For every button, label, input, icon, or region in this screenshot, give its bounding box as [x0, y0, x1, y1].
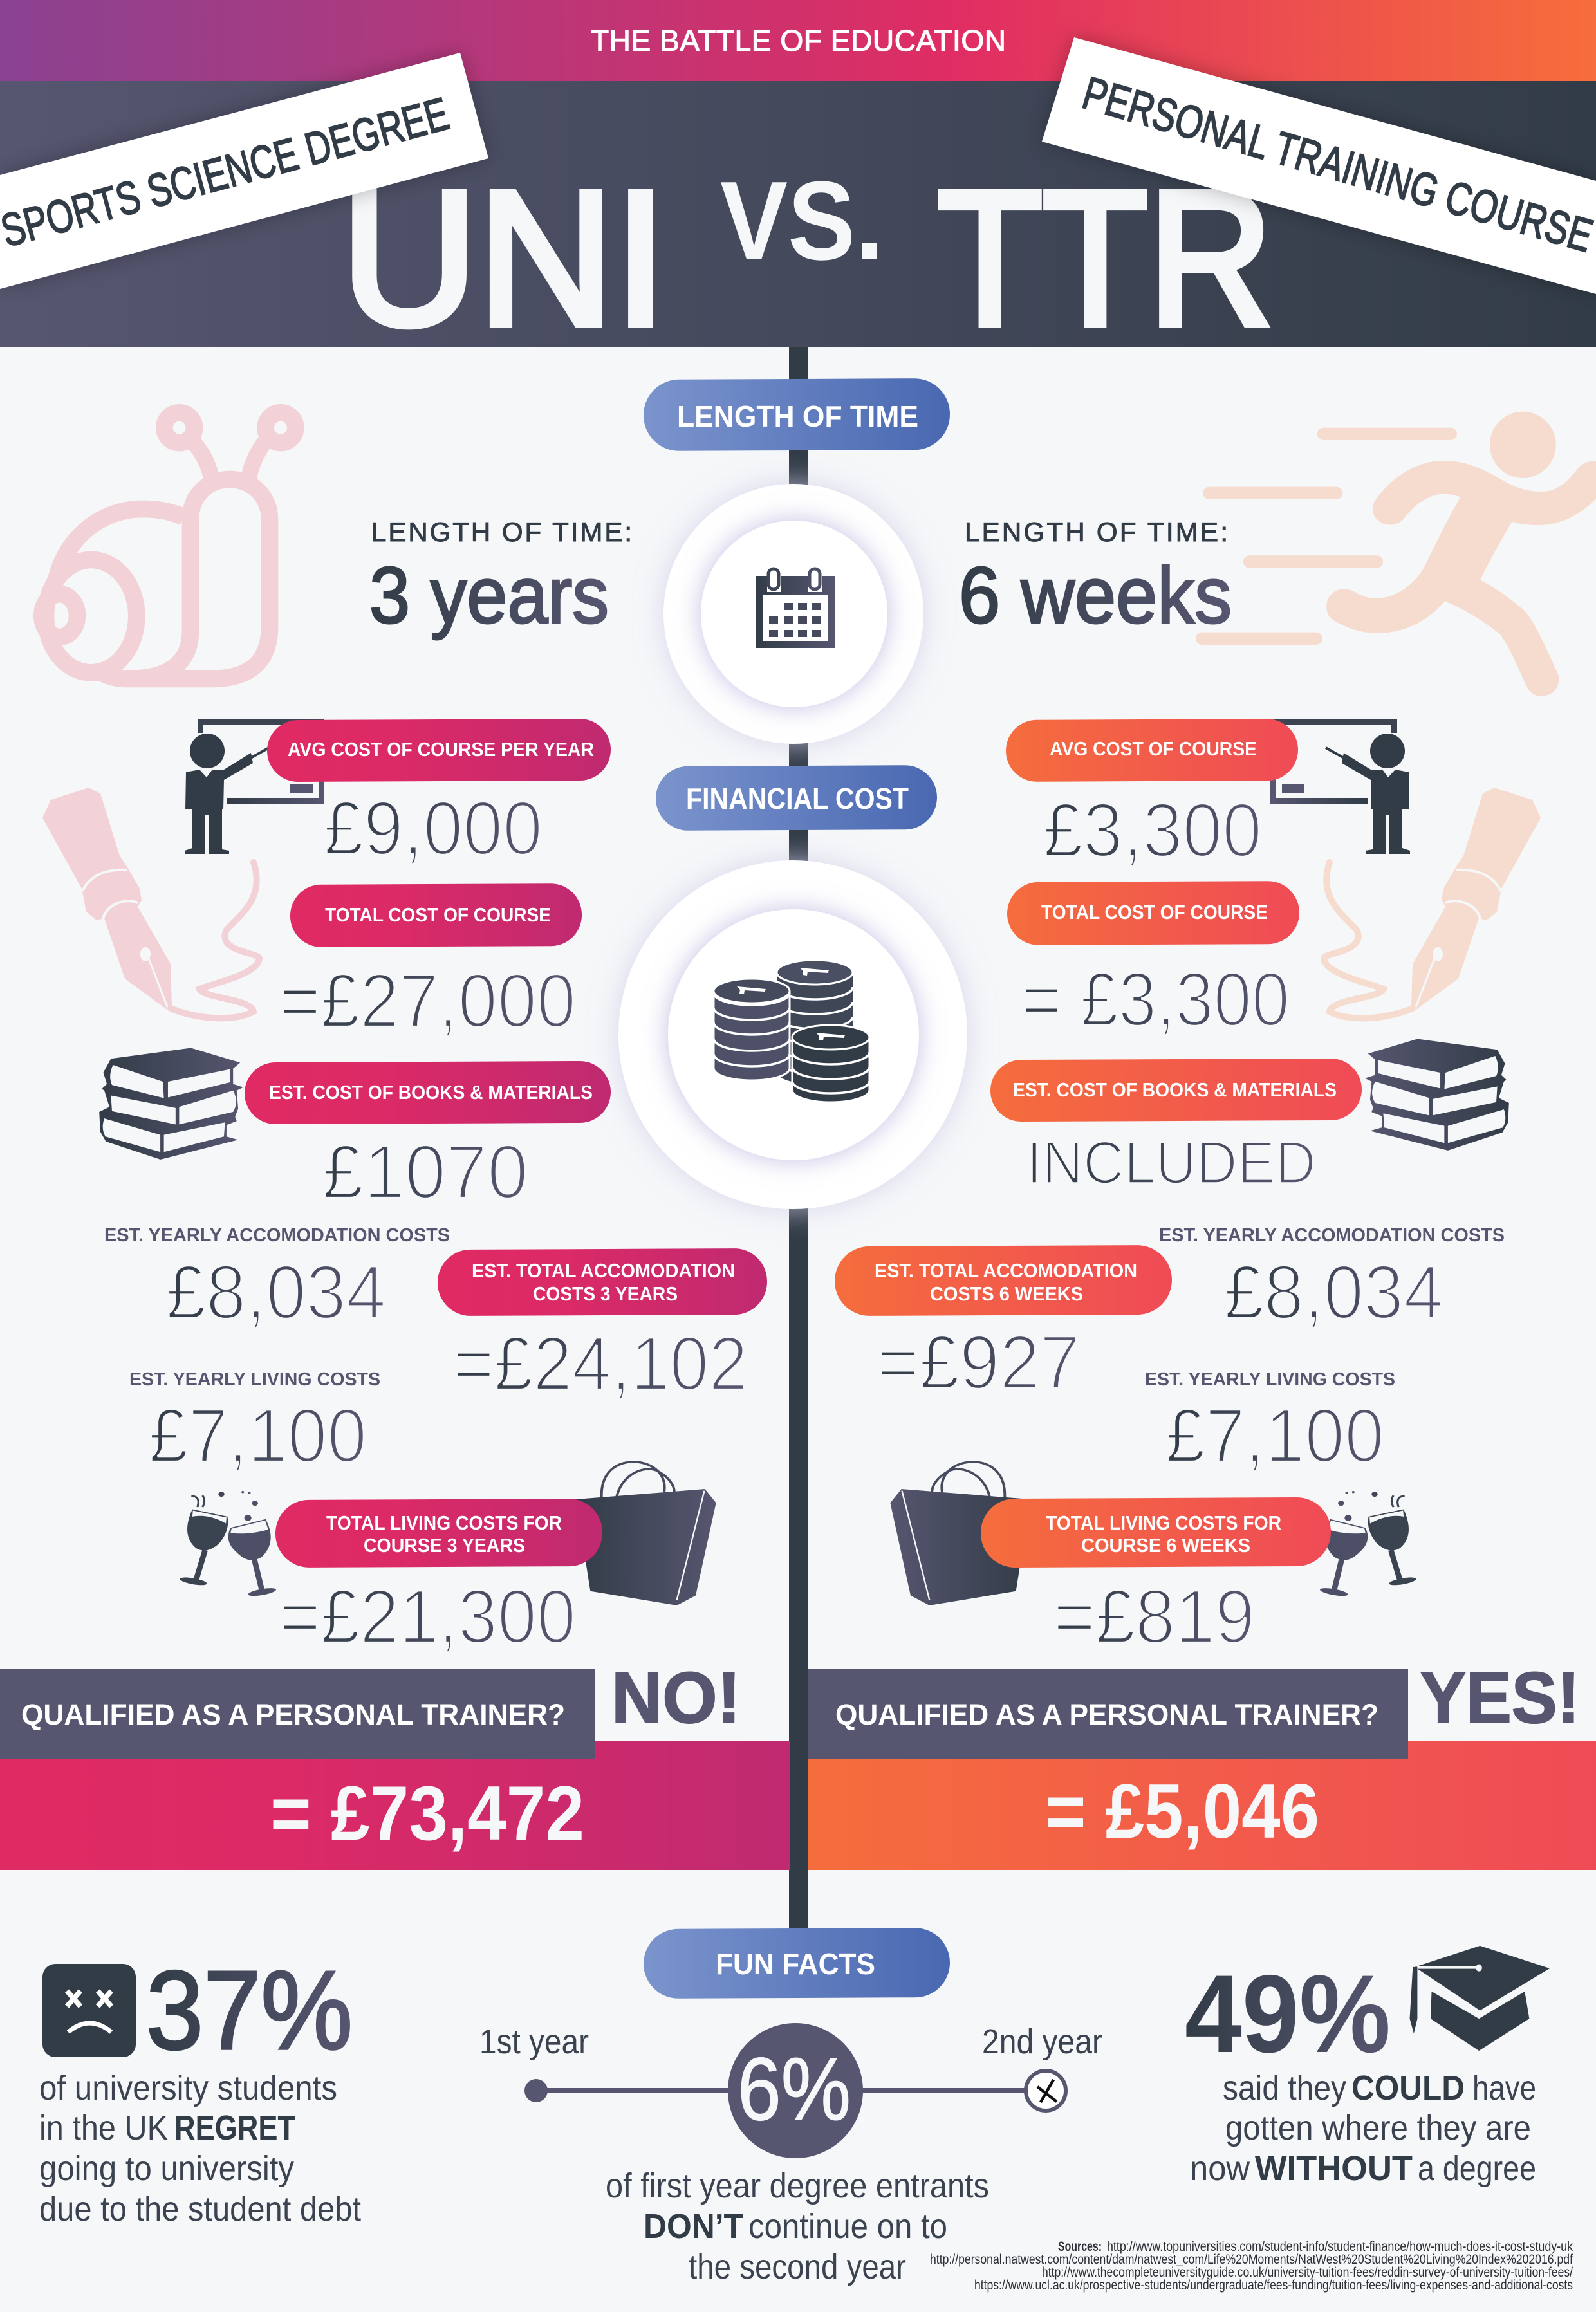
description: COULD: [1351, 2069, 1465, 2107]
top gradient band: [0, 0, 1596, 81]
icon: shopping bag: [575, 1462, 716, 1605]
title: VS.: VS.: [720, 158, 884, 283]
question bar: QUALIFIED AS A PERSONAL TRAINER?: [835, 1698, 1378, 1731]
pill: avg cost of course: [1006, 719, 1298, 782]
sources: Sources:: [1058, 2239, 1102, 2254]
description: due to the student debt: [39, 2190, 361, 2228]
pill: total cost of course: [290, 883, 582, 947]
pill: total accommodation: EST. TOTAL ACCOMODATION: [875, 1259, 1137, 1282]
badge: 6%: [728, 2023, 863, 2158]
figure: £27,000: =£27,000: [279, 958, 576, 1044]
label: yearly accommodation: EST. YEARLY ACCOMODATION COSTS: [1159, 1225, 1505, 1246]
figure: £1070: £1070: [322, 1129, 528, 1215]
icon: wine glasses: [1319, 1491, 1417, 1598]
answer: no: NO!: [611, 1658, 741, 1738]
pill: total living costs: TOTAL LIVING COSTS FOR: [326, 1512, 562, 1534]
pill: total accommodation: COSTS 6 WEEKS: [930, 1282, 1083, 1305]
total: £5,046: = £5,046: [1045, 1768, 1319, 1854]
description: in the UK: [39, 2109, 168, 2147]
pill: financial cost: [656, 765, 937, 831]
panel: 6 percent fact: [479, 2022, 1102, 2286]
pill: fun facts: FUN FACTS: [716, 1947, 875, 1981]
pill: total living costs: COURSE 6 WEEKS: [1081, 1534, 1250, 1557]
pill: total cost of course: TOTAL COST OF COURSE: [1041, 901, 1268, 923]
circle: coin medallion: [618, 860, 967, 1209]
figure: £927: =£927: [877, 1320, 1080, 1405]
icon: fountain pen: [42, 788, 259, 1018]
pill: total living costs: [275, 1499, 602, 1568]
description: [1190, 2069, 1536, 2188]
right: length of time: 6 weeks: [959, 551, 1232, 640]
icon: teacher at board: [185, 719, 324, 854]
icon: graduation cap: [1410, 1946, 1550, 2051]
description: said they: [1223, 2069, 1346, 2107]
panel: personal training costs: [835, 719, 1541, 1660]
panel: 37 percent fact: [39, 1947, 361, 2228]
title: UNI: UNI: [341, 151, 667, 365]
pill: financial cost: FINANCIAL COST: [686, 782, 909, 815]
label: yearly accommodation: EST. YEARLY ACCOMODATION COSTS: [104, 1225, 450, 1246]
pill: total living costs: COURSE 3 YEARS: [364, 1534, 525, 1557]
icon: calendar: [756, 569, 835, 648]
icon: shopping bag: [890, 1462, 1031, 1605]
description: of university students: [39, 2069, 337, 2107]
figure: £8,034: £8,034: [166, 1250, 386, 1335]
figure: £3,300 total: = £3,300: [1021, 957, 1290, 1042]
icon: snail: [42, 412, 295, 679]
icon: wine glasses: [179, 1491, 277, 1598]
description: [606, 2167, 989, 2286]
dark header band: [0, 81, 1596, 347]
pill: total accommodation: COSTS 3 YEARS: [533, 1282, 678, 1305]
icon: sad face: [42, 1964, 136, 2057]
description: continue on to: [748, 2207, 947, 2246]
label: yearly living: EST. YEARLY LIVING COSTS: [129, 1369, 380, 1390]
pill: total cost of course: [1007, 881, 1299, 945]
pill: total accommodation: [438, 1248, 767, 1316]
pill: length of time: LENGTH OF TIME: [677, 400, 918, 433]
panel: university total: [0, 1658, 790, 1870]
label: 2nd year: 2nd year: [982, 2022, 1102, 2061]
figure: £819: =£819: [1053, 1574, 1255, 1660]
total: £73,472: = £73,472: [270, 1770, 584, 1856]
description: REGRET: [174, 2109, 295, 2147]
description: have: [1472, 2069, 1536, 2107]
total band: [808, 1741, 1596, 1870]
panel: header: [0, 0, 1596, 365]
figure: 49%: 49%: [1185, 1952, 1391, 2076]
icon: books: [99, 1048, 243, 1160]
figure: £7,100: £7,100: [1165, 1393, 1384, 1479]
figure: £3,300: £3,300: [1043, 788, 1262, 873]
description: WITHOUT: [1255, 2149, 1413, 2188]
figure: £9,000: £9,000: [324, 786, 543, 871]
description: now: [1190, 2149, 1250, 2188]
description: the second year: [689, 2248, 906, 2286]
circle: calendar medallion: [663, 484, 923, 744]
answer: yes: YES!: [1420, 1658, 1580, 1738]
description: [39, 2069, 361, 2228]
subtitle: THE BATTLE OF EDUCATION: [591, 24, 1006, 57]
timeline: [524, 2079, 1032, 2102]
question bar: [808, 1669, 1408, 1759]
left: length of time: 3 years: [369, 551, 609, 640]
badge: 6%: 6%: [738, 2040, 851, 2139]
pill: avg cost per year: AVG COST OF COURSE PER YEAR: [288, 738, 594, 761]
pill: total cost of course: TOTAL COST OF COURSE: [325, 903, 551, 926]
question bar: QUALIFIED AS A PERSONAL TRAINER?: [21, 1698, 565, 1731]
icon: running man: [1196, 412, 1596, 696]
pill: books and materials: EST. COST OF BOOKS & MATERIALS: [269, 1081, 593, 1104]
description: DON’T: [644, 2207, 743, 2246]
question bar: [0, 1669, 595, 1759]
figure: 37%: 37%: [146, 1947, 353, 2073]
pill: total living costs: [981, 1497, 1331, 1568]
label: 1st year: 1st year: [479, 2022, 589, 2061]
icon: crossed circle: [1026, 2071, 1066, 2111]
right: length of time: LENGTH OF TIME:: [965, 517, 1228, 547]
pill: books and materials: [990, 1059, 1362, 1122]
figure: £24,102: =£24,102: [453, 1321, 748, 1407]
pill: avg cost per year: [267, 719, 611, 782]
pill: avg cost of course: AVG COST OF COURSE: [1050, 737, 1257, 760]
title: TTR: TTR: [937, 151, 1273, 365]
figure: £21,300: =£21,300: [279, 1574, 576, 1660]
pill: books and materials: EST. COST OF BOOKS & MATERIALS: [1013, 1078, 1337, 1101]
pill: total accommodation: EST. TOTAL ACCOMODATION: [472, 1259, 735, 1282]
banner: sports science degree: SPORTS SCIENCE DEGREE: [0, 88, 454, 257]
panel: 49 percent fact: [1185, 1946, 1550, 2188]
icon: coin stacks: [714, 960, 869, 1102]
pill: books and materials: [245, 1061, 611, 1124]
icon: fountain pen: [1324, 788, 1541, 1018]
figure: £7,100: £7,100: [149, 1393, 367, 1479]
pill: total accommodation: [835, 1245, 1172, 1316]
icon: books: [1365, 1039, 1509, 1151]
label: yearly living: EST. YEARLY LIVING COSTS: [1145, 1369, 1395, 1390]
centre divider line: [789, 341, 808, 1937]
panel: university costs: [42, 719, 767, 1660]
pill: total living costs: TOTAL LIVING COSTS FOR: [1046, 1512, 1281, 1534]
description: going to university: [39, 2149, 294, 2188]
figure: included: INCLUDED: [1026, 1129, 1316, 1196]
figure: £8,034: £8,034: [1224, 1250, 1443, 1335]
description: gotten where they are: [1225, 2109, 1531, 2147]
description: a degree: [1418, 2149, 1536, 2188]
total band: [0, 1741, 790, 1870]
left: length of time: LENGTH OF TIME:: [371, 517, 632, 547]
right: length of time: [959, 517, 1232, 640]
pill: fun facts: [644, 1928, 950, 1999]
pill: length of time: [644, 378, 950, 451]
icon: teacher at board: [1270, 719, 1410, 854]
sources: [930, 2239, 1573, 2293]
panel: personal training total: [808, 1658, 1596, 1870]
description: of first year degree entrants: [606, 2167, 989, 2205]
